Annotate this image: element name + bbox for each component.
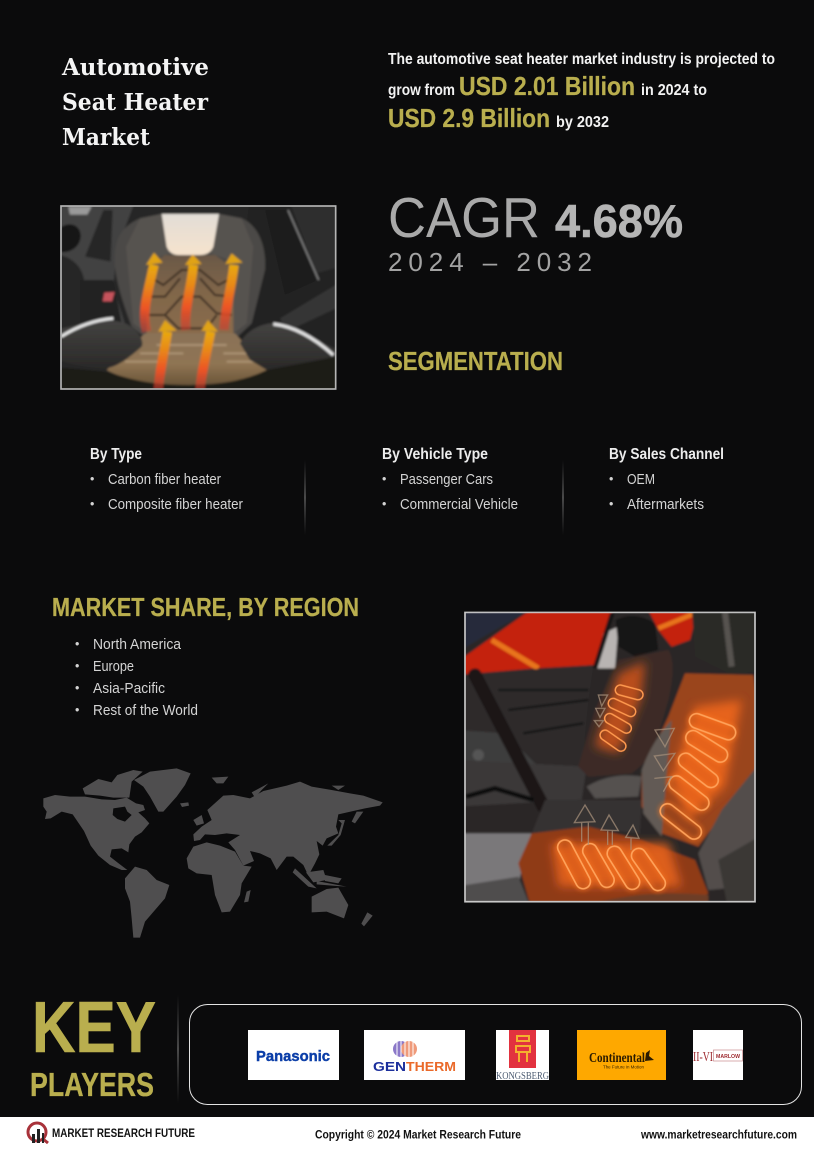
logo: Gentherm [364, 1030, 465, 1080]
segment: by sales channel: Aftermarkets [627, 497, 704, 513]
market projection text: USD 2.9 Billion [388, 103, 550, 133]
key players panel [190, 1004, 802, 1104]
key players heading [30, 988, 156, 1103]
region list: North America [93, 637, 182, 653]
segment: by vehicle type: • [382, 472, 386, 486]
market projection text: by 2032 [556, 114, 609, 131]
seat cushion [518, 827, 708, 910]
segment: by vehicle type: Passenger Cars [400, 472, 493, 488]
market projection text: The automotive seat heater market industry is projected to [388, 51, 775, 68]
console [532, 800, 642, 833]
segment: by sales channel [609, 446, 724, 513]
market projection text: grow from [388, 82, 455, 99]
coil passenger seat [598, 684, 644, 753]
segment: by vehicle type: Commercial Vehicle [400, 497, 518, 513]
logo: Continental: The Future in Motion [603, 1064, 644, 1070]
segment: by sales channel: By Sales Channel [609, 446, 724, 463]
headrest panel [162, 214, 219, 255]
segment: by type: Composite fiber heater [108, 497, 243, 513]
heading: market share by region: MARKET SHARE, BY REGION [52, 592, 359, 622]
segment: by type: By Type [90, 446, 142, 463]
region list: Europe [93, 659, 134, 675]
CAGR figure: 4.68% [555, 195, 683, 247]
segment: by type: • [90, 472, 94, 486]
image: heated car interior with seat coils [464, 612, 756, 903]
logo: Continental [577, 1030, 666, 1080]
seat back [115, 214, 265, 337]
segment: by sales channel: OEM [627, 472, 655, 488]
CAGR figure [388, 186, 683, 277]
title [61, 54, 209, 151]
quilted centre [147, 255, 233, 335]
driver side bolster [698, 768, 754, 891]
region list: • [75, 637, 79, 651]
coil cushion [555, 837, 668, 893]
logo: Gentherm: THERM [406, 1059, 456, 1074]
dashboard and door [466, 664, 592, 673]
segment: by type: Carbon fiber heater [108, 472, 221, 488]
footer bar: Copyright © 2024 Market Research Future [315, 1128, 521, 1142]
region list: Rest of the World [93, 703, 198, 719]
key players heading: KEY [32, 988, 156, 1068]
logo: Kongsberg: KONGSBERG [496, 1071, 549, 1082]
logo: Panasonic [248, 1030, 339, 1080]
console [62, 206, 134, 323]
steering wheel [475, 675, 543, 807]
coil driver back [657, 712, 738, 842]
door [223, 197, 347, 400]
segment: by vehicle type [382, 446, 518, 513]
footer bar [0, 1117, 814, 1150]
logo: Gentherm: GEN [373, 1059, 406, 1074]
heat arrows [145, 253, 243, 390]
title: Automotive [61, 54, 209, 81]
logo: Continental: Continental [589, 1050, 645, 1065]
market projection text: in 2024 to [641, 82, 707, 99]
CAGR figure: 2024 – 2032 [388, 247, 592, 277]
segment: by type: • [90, 497, 94, 511]
segment: by sales channel: • [609, 472, 613, 486]
red window [466, 612, 613, 676]
segment: by vehicle type: By Vehicle Type [382, 446, 488, 463]
logo: II-VI Marlow: II-VI [693, 1050, 713, 1065]
white pillar [595, 627, 618, 668]
bolsters [62, 320, 144, 368]
driver seat headrest [690, 612, 698, 628]
title: Seat Heater [62, 89, 209, 116]
segment: by vehicle type: • [382, 497, 386, 511]
heading: segmentation: SEGMENTATION [388, 346, 563, 376]
driver seat back [642, 673, 765, 847]
title: Market [62, 124, 150, 151]
region list: • [75, 681, 79, 695]
footer bar: MARKET RESEARCH FUTURE [52, 1126, 195, 1140]
small outline arrows [574, 695, 675, 850]
world map [43, 768, 383, 938]
region list: Asia-Pacific [93, 681, 165, 697]
CAGR figure: CAGR [388, 186, 540, 250]
market projection text [388, 51, 775, 133]
logo: Kongsberg [496, 1030, 549, 1082]
image: heated car seat with arrows [60, 205, 336, 390]
footer logo icon [28, 1123, 48, 1143]
region list: • [75, 703, 79, 717]
passenger seat [616, 616, 658, 657]
key players heading: PLAYERS [30, 1066, 154, 1103]
region list: • [75, 659, 79, 673]
coil glow [555, 712, 738, 893]
market projection text: USD 2.01 Billion [459, 71, 635, 101]
seat cushion [107, 333, 268, 385]
segment: by type [90, 446, 243, 513]
logo: Panasonic: Panasonic [256, 1048, 330, 1065]
logo: II-VI Marlow: MARLOW [716, 1054, 740, 1060]
segment: by sales channel: • [609, 497, 613, 511]
region list [75, 637, 198, 719]
logo: II-VI Marlow [693, 1030, 743, 1080]
